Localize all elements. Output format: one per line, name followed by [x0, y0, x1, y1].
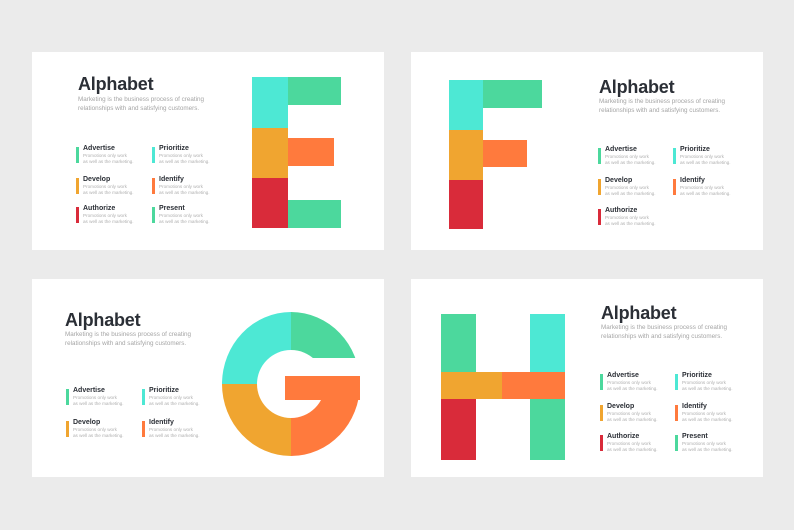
- item: Identify: Identify: [680, 177, 705, 184]
- item: Present: as well as the marketing.: [159, 219, 210, 224]
- subtitle: [65, 331, 191, 346]
- item: Advertise: Promotions only work: [73, 395, 117, 400]
- item: Advertise: [600, 372, 658, 391]
- item: Identify: as well as the marketing.: [680, 191, 731, 196]
- subtitle: [78, 96, 204, 112]
- item: Present: Promotions only work: [159, 213, 203, 218]
- item: Identify: as well as the marketing.: [149, 433, 200, 438]
- item: Identify: as well as the marketing.: [159, 190, 210, 195]
- item: Present: as well as the marketing.: [682, 447, 733, 452]
- title: Alphabet: [601, 303, 676, 323]
- title: Alphabet: [65, 310, 140, 330]
- item: Develop: as well as the marketing.: [83, 190, 134, 195]
- item: Authorize: Authorize: [83, 205, 115, 212]
- item: Prioritize: Prioritize: [682, 372, 712, 379]
- item: Develop: [66, 418, 124, 438]
- subtitle: [599, 98, 725, 114]
- item: Authorize: [598, 206, 656, 226]
- item: Identify: [152, 176, 210, 195]
- item: Develop: Develop: [83, 176, 110, 183]
- item: Identify: [142, 418, 200, 438]
- item: Develop: Promotions only work: [73, 427, 117, 432]
- item: Advertise: Advertise: [607, 372, 639, 379]
- item: Authorize: [76, 204, 134, 224]
- item: Identify: Identify: [682, 403, 707, 410]
- item: Identify: Promotions only work: [149, 427, 193, 432]
- item: Prioritize: [142, 386, 200, 406]
- item: Develop: Promotions only work: [83, 184, 127, 189]
- item: Advertise: [598, 146, 656, 165]
- item: Identify: [675, 402, 733, 422]
- item: Advertise: [76, 144, 134, 164]
- item: Authorize: [600, 432, 658, 452]
- item: Identify: [673, 176, 731, 196]
- item: Identify: Identify: [159, 176, 184, 183]
- letter E: [252, 77, 341, 228]
- item: Authorize: Authorize: [607, 433, 639, 440]
- item: Prioritize: Promotions only work: [680, 154, 724, 159]
- item: Authorize: Authorize: [605, 207, 637, 214]
- item: Identify: as well as the marketing.: [682, 417, 733, 422]
- letter H: [441, 314, 565, 460]
- subtitle: [601, 324, 727, 340]
- item: Present: [675, 433, 733, 452]
- item: Advertise: as well as the marketing.: [83, 159, 134, 164]
- title: Alphabet: [599, 77, 674, 97]
- panel: H: [411, 279, 763, 477]
- item: Advertise: as well as the marketing.: [73, 401, 124, 406]
- item: Present: [152, 205, 210, 224]
- subtitle: Marketing is the business process of creating: [78, 96, 204, 103]
- item: Authorize: as well as the marketing.: [605, 221, 656, 226]
- item: Advertise: Promotions only work: [607, 380, 651, 385]
- panel: G: [32, 279, 384, 477]
- item: Develop: [598, 176, 656, 196]
- subtitle: relationships with and satisfying customers.: [78, 104, 199, 112]
- item: Prioritize: [675, 372, 733, 391]
- item: Identify: Promotions only work: [680, 185, 724, 190]
- item: Advertise: Promotions only work: [605, 154, 649, 159]
- item: Prioritize: Prioritize: [149, 387, 179, 394]
- item: Develop: Promotions only work: [605, 185, 649, 190]
- subtitle: relationships with and satisfying customers.: [601, 332, 722, 340]
- item: Advertise: Advertise: [83, 145, 115, 152]
- subtitle: Marketing is the business process of creating: [65, 331, 191, 338]
- letter G: [222, 312, 360, 456]
- subtitle: Marketing is the business process of creating: [601, 324, 727, 331]
- letter F: [449, 80, 542, 229]
- panel: F: [411, 52, 763, 250]
- item: Identify: Identify: [149, 419, 174, 426]
- item: Identify: Promotions only work: [159, 184, 203, 189]
- subtitle: Marketing is the business process of creating: [599, 98, 725, 105]
- item: Authorize: Promotions only work: [605, 215, 649, 220]
- item: Prioritize: Promotions only work: [682, 380, 726, 385]
- item: Advertise: Advertise: [73, 387, 105, 394]
- item: Develop: [600, 402, 658, 422]
- item: Prioritize: as well as the marketing.: [159, 159, 210, 164]
- item: Advertise: [66, 386, 124, 406]
- item: Advertise: as well as the marketing.: [605, 160, 656, 165]
- item: Advertise: Promotions only work: [83, 153, 127, 158]
- item: Develop: [76, 176, 134, 195]
- item: Develop: as well as the marketing.: [605, 191, 656, 196]
- item: Prioritize: as well as the marketing.: [682, 386, 733, 391]
- item: Develop: as well as the marketing.: [607, 417, 658, 422]
- item: Prioritize: [673, 146, 731, 165]
- item: Prioritize: Prioritize: [680, 146, 710, 153]
- item: Prioritize: Promotions only work: [159, 153, 203, 158]
- panel: E: [32, 52, 384, 250]
- item: Authorize: Promotions only work: [607, 441, 651, 446]
- item: Prioritize: as well as the marketing.: [680, 160, 731, 165]
- item: Authorize: Promotions only work: [83, 213, 127, 218]
- item: Prioritize: Prioritize: [159, 145, 189, 152]
- item: Develop: Develop: [605, 177, 632, 184]
- item: Develop: Promotions only work: [607, 411, 651, 416]
- item: Develop: Develop: [73, 419, 100, 426]
- item: Present: Present: [682, 433, 708, 440]
- item: Advertise: as well as the marketing.: [607, 386, 658, 391]
- subtitle: relationships with and satisfying customers.: [65, 340, 186, 346]
- item: Authorize: as well as the marketing.: [607, 447, 658, 452]
- item: Develop: as well as the marketing.: [73, 433, 124, 438]
- title: Alphabet: [78, 74, 153, 94]
- item: Prioritize: as well as the marketing.: [149, 401, 200, 406]
- item: Present: Promotions only work: [682, 441, 726, 446]
- item: Advertise: Advertise: [605, 146, 637, 153]
- item: Prioritize: [152, 144, 210, 164]
- item: Authorize: as well as the marketing.: [83, 219, 134, 224]
- subtitle: relationships with and satisfying customers.: [599, 106, 720, 114]
- item: Identify: Promotions only work: [682, 411, 726, 416]
- item: Present: Present: [159, 205, 185, 212]
- item: Prioritize: Promotions only work: [149, 395, 193, 400]
- item: Develop: Develop: [607, 403, 634, 410]
